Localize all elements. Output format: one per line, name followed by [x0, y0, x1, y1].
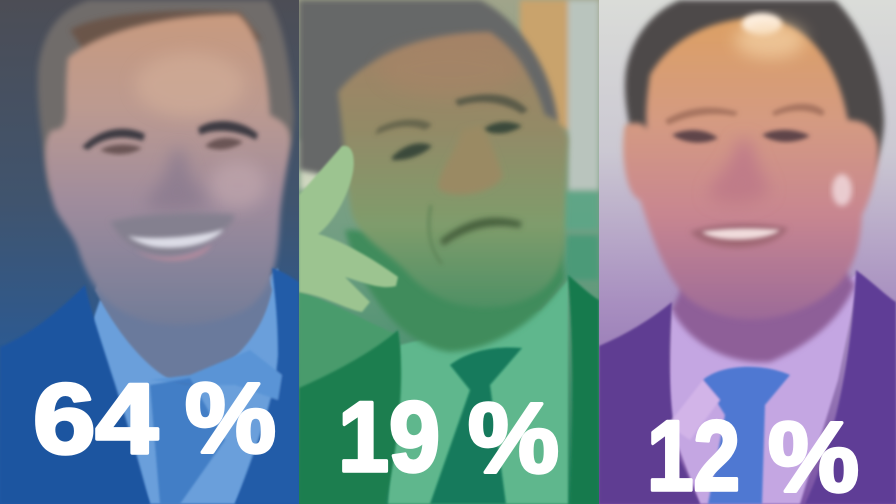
- jacket, striped shirt and dotted tie: [299, 275, 599, 504]
- panel: candidate 64 % (blue): [0, 0, 299, 504]
- purple panel background: [599, 0, 896, 504]
- percentage: 64 %: 64: [33, 363, 158, 474]
- blue panel background: [0, 0, 299, 504]
- green panel background: [299, 0, 599, 504]
- hand with fingers: [299, 146, 398, 400]
- portrait: purple-tinted man: [623, 0, 884, 504]
- percentage: 19 %: 19: [338, 381, 440, 492]
- panel: candidate 12 % (purple): [599, 0, 896, 504]
- percentage: 64 %: %: [185, 362, 276, 473]
- portrait: green-tinted man with hand at temple: [299, 0, 568, 504]
- jacket and shirt collar: [0, 268, 299, 504]
- blurred background shelves: [300, 0, 599, 280]
- percentage: 19 %: %: [468, 382, 559, 493]
- jacket, shirt and blue tie: [599, 270, 896, 504]
- panel: candidate 19 % (green): [299, 0, 599, 504]
- portrait: blue-tinted man: [38, 0, 294, 504]
